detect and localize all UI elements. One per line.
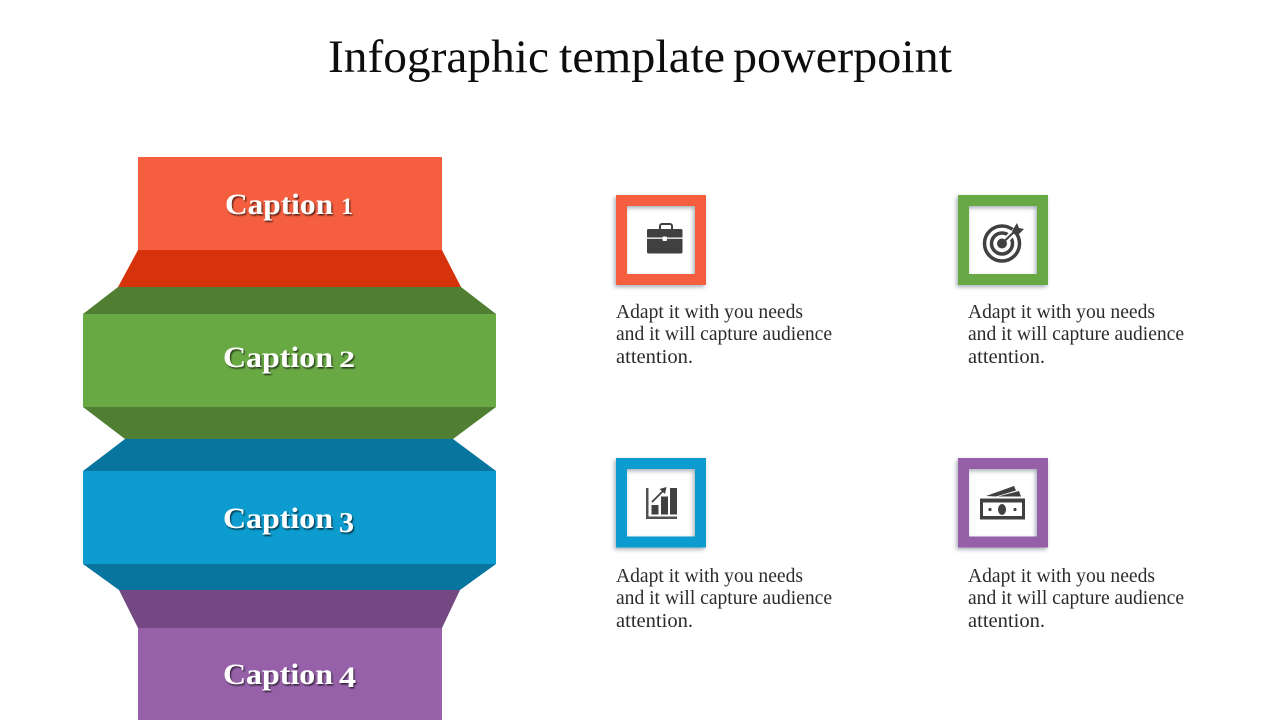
description: attention. [616, 610, 693, 632]
description: Adapt it with you needs [968, 565, 1155, 587]
description [968, 565, 1184, 632]
band: caption 4: 4 [339, 661, 356, 694]
band: caption 1: Caption [225, 188, 333, 221]
band: caption 4: Caption [223, 658, 333, 691]
icon frame: orange [622, 200, 700, 280]
description: attention. [968, 610, 1045, 632]
icon frame: green [964, 200, 1042, 280]
band: caption 3: 3 [339, 507, 354, 539]
band: caption 1 [118, 157, 461, 287]
title: template [559, 31, 725, 83]
item: growth chart [616, 464, 832, 632]
description: and it will capture audience [616, 587, 832, 609]
icon: briefcase [647, 224, 682, 254]
description: and it will capture audience [968, 587, 1184, 609]
item: target [964, 200, 1184, 368]
icon: banknotes [980, 486, 1025, 520]
description [616, 565, 832, 632]
title: powerpoint [733, 31, 952, 83]
title: Infographic [328, 31, 549, 83]
icon frame: blue [622, 464, 700, 542]
description: Adapt it with you needs [616, 565, 803, 587]
band: caption 3: Caption [223, 502, 333, 535]
band: caption 1: 1 [341, 194, 353, 219]
stacked captions column [83, 157, 496, 720]
description: attention. [616, 346, 693, 368]
description: Adapt it with you needs [968, 301, 1155, 323]
band: caption 2: Caption [223, 341, 333, 374]
title [328, 31, 952, 83]
description [968, 301, 1184, 368]
icon: bar chart with arrow [646, 487, 677, 519]
band: caption 2 [83, 287, 496, 439]
description [616, 301, 832, 368]
band: caption 3 [83, 439, 496, 590]
description: Adapt it with you needs [616, 301, 803, 323]
icon frame: purple [964, 464, 1042, 542]
band: caption 4 [119, 590, 460, 720]
description: and it will capture audience [616, 323, 832, 345]
item: briefcase [616, 200, 832, 368]
band: caption 2: 2 [339, 347, 355, 372]
icon: target with arrow [984, 223, 1024, 261]
item: money [964, 464, 1184, 632]
description: attention. [968, 346, 1045, 368]
description: and it will capture audience [968, 323, 1184, 345]
